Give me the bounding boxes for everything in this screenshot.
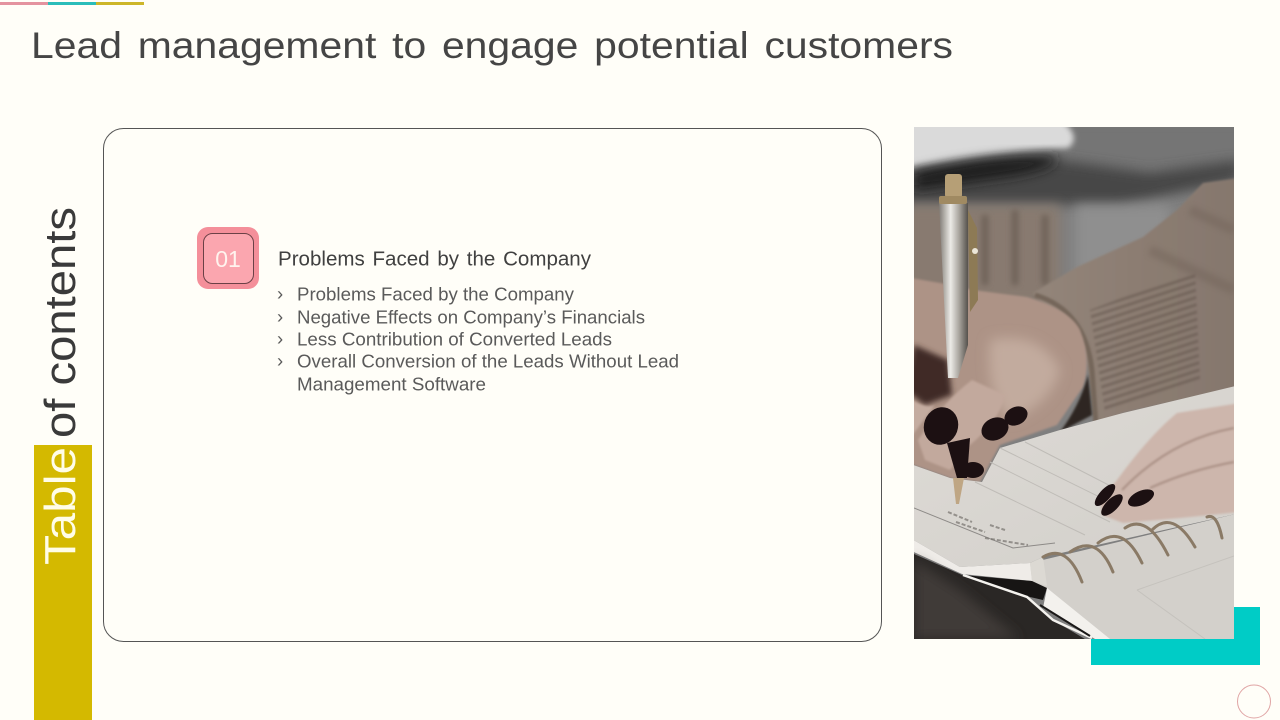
background blur: desk bbox=[914, 127, 1234, 300]
bullet list: Negative Effects on Company’s Financials bbox=[297, 306, 645, 328]
bullet list: › bbox=[277, 306, 283, 327]
bullet list: › bbox=[277, 328, 283, 349]
vertical heading: Table of contents: of contents bbox=[36, 207, 85, 438]
bullet list: Less Contribution of Converted Leads bbox=[297, 328, 612, 350]
bullet list: Problems Faced by the Company bbox=[297, 284, 575, 304]
bullet list: Management Software bbox=[297, 374, 486, 394]
pen nib bbox=[953, 478, 964, 504]
photo: hands writing in notebook bbox=[914, 127, 1234, 639]
writing hand bbox=[905, 277, 1092, 482]
table and notebook edge bbox=[914, 554, 1110, 639]
sidebar gold block bbox=[34, 445, 92, 720]
spiral binding bbox=[1043, 516, 1222, 582]
sweater cuff bbox=[1033, 178, 1240, 425]
teal accent bracket bbox=[1091, 607, 1260, 665]
panel: contents bbox=[104, 128, 882, 642]
title: Lead management to engage potential customers bbox=[31, 25, 953, 66]
bullet list bbox=[277, 283, 679, 394]
section heading: Problems Faced by the Company bbox=[278, 248, 591, 270]
notebook bbox=[905, 385, 1240, 645]
badge: 01 bbox=[197, 227, 259, 289]
page-number circle bbox=[1238, 685, 1270, 718]
bullet list: › bbox=[277, 283, 283, 304]
right hand bbox=[1100, 403, 1240, 523]
bullet list: Overall Conversion of the Leads Without Lead bbox=[297, 350, 679, 372]
badge: 01: 01 bbox=[215, 246, 241, 272]
vertical heading: Table of contents bbox=[36, 207, 85, 565]
top colour accent strip bbox=[0, 2, 144, 5]
nails bbox=[919, 402, 1157, 519]
bullet list: › bbox=[277, 350, 283, 371]
pen bbox=[939, 174, 978, 378]
vertical heading: Table of contents: Table bbox=[36, 447, 85, 565]
